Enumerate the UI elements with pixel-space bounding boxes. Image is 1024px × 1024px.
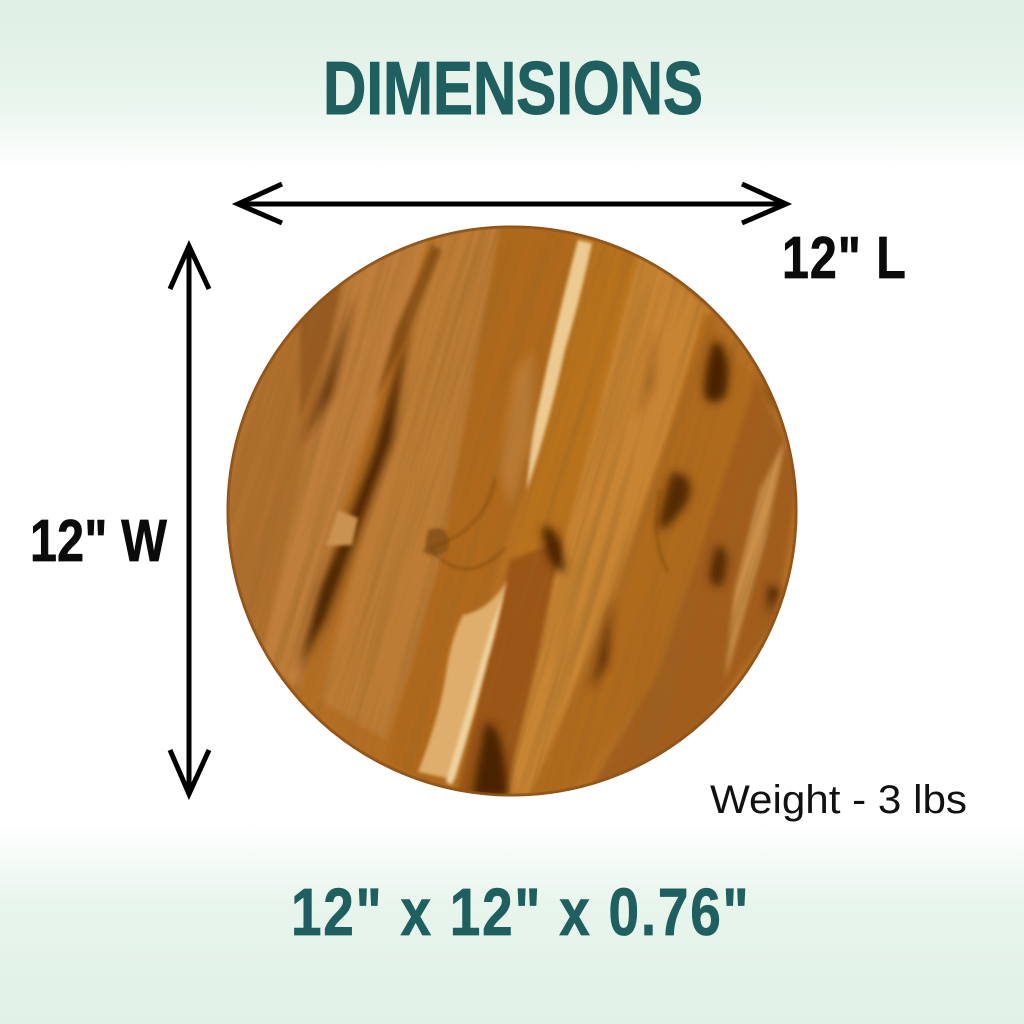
pale sapwood streaks — [326, 240, 592, 785]
label: width: 12" W — [30, 509, 167, 574]
dark streaks and knots — [298, 295, 780, 797]
weight note: Weight - 3 lbs — [710, 778, 967, 822]
wooden round board — [226, 226, 798, 796]
rim groove — [228, 227, 796, 795]
title: DIMENSIONS — [323, 48, 703, 131]
wood colour bands — [225, 225, 800, 800]
label: length: 12" L — [782, 226, 906, 291]
overall dimensions: 12" x 12" x 0.76" — [291, 875, 749, 949]
wood grain texture — [246, 229, 782, 793]
arrow: length — [238, 184, 786, 223]
arrow: width — [170, 246, 209, 794]
knot outlines — [430, 480, 668, 572]
